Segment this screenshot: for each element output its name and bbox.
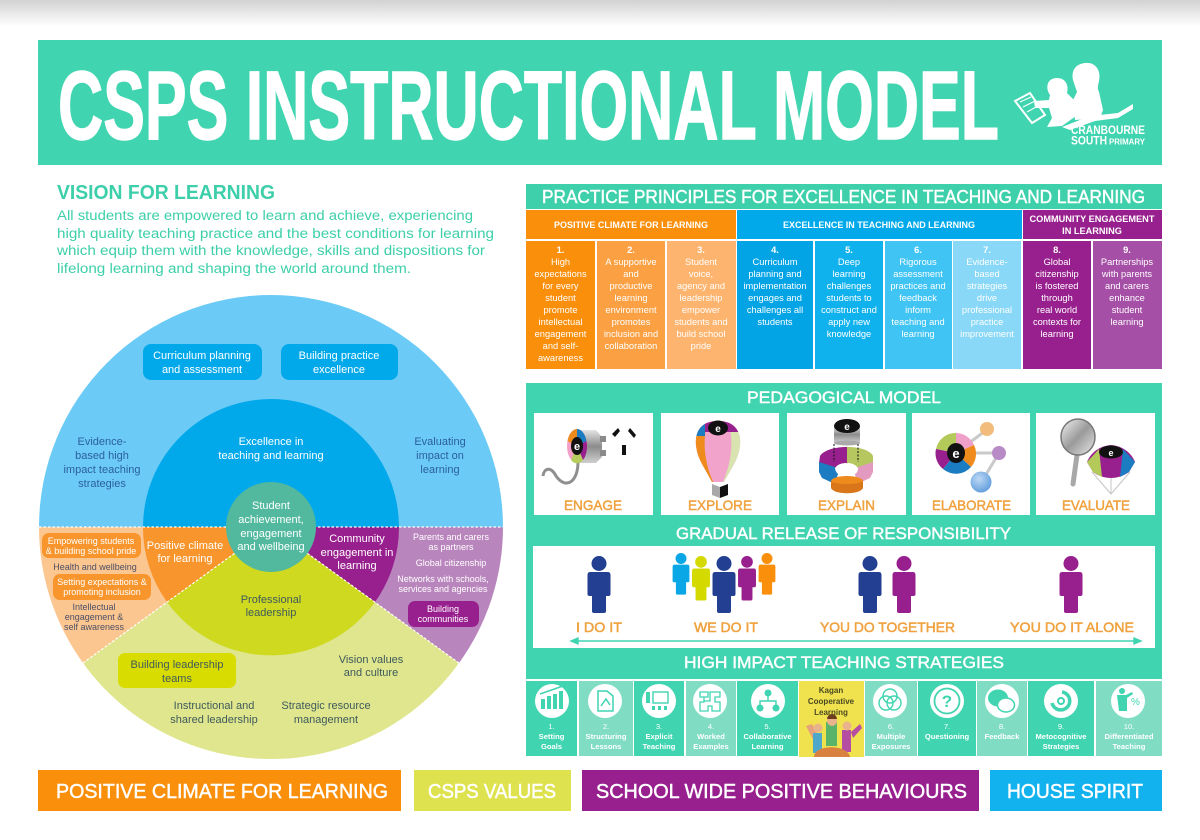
- principle 2: collaboration: [605, 341, 657, 351]
- strategy 5: Collaborative: [743, 732, 792, 741]
- footer bar: positive behaviours: SCHOOL WIDE POSITIVE BEHAVIOURS: [596, 781, 967, 803]
- principle 5: 5.: [845, 245, 853, 255]
- principle 5: Deep: [838, 257, 860, 267]
- pill: building practice: Building practice: [299, 350, 379, 362]
- icon: cylinder and ring: e: [844, 422, 850, 433]
- sector: positive climate inner: [143, 527, 271, 602]
- principle 3: agency and: [677, 281, 725, 291]
- principle 8: citizenship: [1035, 269, 1079, 279]
- principle 9: and carers: [1105, 281, 1149, 291]
- title banner: [38, 40, 1162, 165]
- strategy 2: 2.: [603, 722, 609, 731]
- principle 7: 7.: [983, 245, 991, 255]
- label: evidence-based: based high: [75, 450, 129, 462]
- principle 2: environment: [605, 305, 657, 315]
- footer bar: positive climate: [38, 770, 401, 811]
- vision for learning: [56, 182, 494, 276]
- principle 8: learning: [1040, 329, 1074, 339]
- label: vision values: and culture: [344, 667, 398, 679]
- sector: excellence inner: [143, 399, 399, 527]
- principle 5: learning: [832, 269, 866, 279]
- principle 9: learning: [1110, 317, 1144, 327]
- principle 7: improvement: [960, 329, 1014, 339]
- principle 5: [815, 241, 883, 369]
- vision text: All students are empowered to learn and achieve, experiencing: [57, 208, 473, 223]
- principle 6: assessment: [893, 269, 943, 279]
- gradual release heading: GRADUAL RELEASE OF RESPONSIBILITY: [676, 524, 1011, 543]
- principle 7: [953, 241, 1021, 369]
- principle 1: for every: [542, 281, 579, 291]
- strategy 6: 6.: [888, 722, 894, 731]
- centre circle: engagement: [240, 528, 302, 540]
- strategy 1: 1.: [548, 722, 555, 731]
- footer bar: CSPS values: CSPS VALUES: [428, 781, 556, 803]
- Kagan cooperative learning card: Kagan: [819, 686, 843, 695]
- strategy 6: Multiple: [877, 732, 905, 741]
- principle 3: leadership: [680, 293, 722, 303]
- strategy 5: 5.: [764, 722, 771, 731]
- principle 8: is fostered: [1036, 281, 1078, 291]
- strategy 5: Learning: [751, 742, 784, 751]
- strategy 7: Questioning: [925, 732, 970, 741]
- principle 2: A supportive: [605, 257, 657, 267]
- principle 5: challenges: [827, 281, 872, 291]
- label: community engagement: learning: [337, 560, 377, 572]
- label: professional leadership: leadership: [246, 607, 296, 619]
- label: elaborate: ELABORATE: [932, 497, 1011, 513]
- logo: Cranbourne South Primary: SOUTH: [1071, 136, 1107, 148]
- footer bar: positive behaviours: [582, 770, 979, 811]
- strategy 1: Goals: [541, 742, 562, 751]
- vision text: lifelong learning and shaping the world around them.: [57, 261, 411, 276]
- pill: curriculum planning: and assessment: [162, 364, 242, 376]
- label: community engagement: engagement in: [321, 547, 393, 559]
- principle 4: implementation: [743, 281, 807, 291]
- strategy 3: Explicit: [645, 732, 673, 741]
- label: evaluate: EVALUATE: [1062, 497, 1130, 513]
- label: evaluating impact: impact on: [416, 450, 464, 462]
- principle 3: voice,: [689, 269, 713, 279]
- card: explore: [661, 413, 779, 515]
- principle 6: inform: [905, 305, 931, 315]
- pill: building leadership teams: Building leadership: [131, 659, 223, 671]
- strategy 10: 10.: [1124, 722, 1134, 731]
- principle 1: expectations: [534, 269, 587, 279]
- principle 1: student: [545, 293, 576, 303]
- centre circle: [226, 482, 316, 572]
- strategy 5: [737, 681, 798, 756]
- Kagan cooperative learning card: Cooperative: [808, 697, 855, 706]
- principle 6: learning: [901, 329, 935, 339]
- principle 8: Global: [1044, 257, 1070, 267]
- principle 7: based: [974, 269, 1000, 279]
- label: evaluating impact: learning: [420, 464, 460, 476]
- footer bar: positive climate: POSITIVE CLIMATE FOR LEARNING: [56, 781, 388, 803]
- label: positive climate: for learning: [157, 553, 213, 565]
- principle 5: students to: [826, 293, 872, 303]
- Kagan cooperative learning card: [799, 681, 864, 757]
- sector: excellence outer: [39, 295, 503, 527]
- principle 3: [667, 241, 736, 369]
- principle 9: with parents: [1101, 269, 1152, 279]
- principle 4: planning and: [748, 269, 802, 279]
- principle 4: [737, 241, 813, 369]
- principle 6: Rigorous: [899, 257, 937, 267]
- principle 1: High: [551, 257, 570, 267]
- principle 9: Partnerships: [1101, 257, 1153, 267]
- label: networks: services and agencies: [398, 584, 488, 594]
- strategy 6: Exposures: [872, 742, 910, 751]
- pill: empowering students: Empowering students: [48, 536, 135, 546]
- label: networks: Networks with schools,: [397, 574, 489, 584]
- principle 6: feedback: [899, 293, 937, 303]
- label: professional leadership: Professional: [241, 594, 301, 606]
- card: explain: [787, 413, 906, 515]
- people: we do it: [673, 553, 775, 613]
- principle 8: through: [1041, 293, 1073, 303]
- arrow: release continuum: [571, 638, 1141, 644]
- pill: empowering students: [42, 533, 141, 558]
- panel: practice principles: [526, 184, 1162, 369]
- category: positive climate: [526, 210, 736, 239]
- person: you do it alone: [1060, 556, 1082, 613]
- principle 3: 3.: [697, 245, 705, 255]
- principle 7: practice: [971, 317, 1003, 327]
- principle 3: students and: [674, 317, 728, 327]
- principle 8: real world: [1037, 305, 1077, 315]
- sector: community outer: [271, 527, 503, 663]
- principle 1: engagement: [535, 329, 587, 339]
- label: health and wellbeing: Health and wellbeing: [53, 562, 137, 572]
- card: elaborate: [912, 413, 1030, 515]
- high impact heading: HIGH IMPACT TEACHING STRATEGIES: [684, 653, 1004, 672]
- principle 7: strategies: [967, 281, 1008, 291]
- pill: empowering students: & building school pride: [46, 546, 136, 556]
- category: positive climate: POSITIVE CLIMATE FOR LEARNING: [554, 220, 708, 230]
- pill: building practice: excellence: [313, 364, 365, 376]
- label: positive climate: Positive climate: [147, 540, 223, 552]
- principle 7: Evidence-: [966, 257, 1008, 267]
- strategy 1: Setting: [539, 732, 565, 741]
- strategy 9: [1028, 681, 1094, 756]
- principle 2: promotes: [612, 317, 651, 327]
- pill: building practice: [281, 344, 398, 380]
- strategy 8: [977, 681, 1027, 756]
- sector: community inner: [271, 527, 399, 602]
- category: excellence: EXCELLENCE IN TEACHING AND LEARNING: [783, 220, 975, 230]
- principle 6: 6.: [914, 245, 922, 255]
- label: evidence-based: impact teaching: [63, 464, 141, 476]
- logo: Cranbourne South Primary: CRANBOURNE: [1071, 125, 1145, 137]
- label: explain: EXPLAIN: [818, 497, 875, 513]
- category: community engagement: [1023, 210, 1162, 239]
- strategy 3: Teaching: [643, 742, 676, 751]
- icon: magnifier and parachute: e: [1108, 448, 1114, 458]
- principle 5: knowledge: [827, 329, 871, 339]
- strategy 9: Strategies: [1043, 742, 1079, 751]
- principle 6: practices and: [890, 281, 946, 291]
- vision text: which equip them with the knowledge, skills and dispositions for: [56, 243, 486, 258]
- label: strategic resource: management: [294, 714, 358, 726]
- practice principles heading: PRACTICE PRINCIPLES FOR EXCELLENCE IN TEACHING AND LEARNING: [542, 186, 1145, 207]
- vision heading: VISION FOR LEARNING: [57, 182, 275, 204]
- centre circle: and wellbeing: [237, 541, 305, 553]
- strategy 6: [865, 681, 917, 756]
- principle 2: inclusion and: [604, 329, 658, 339]
- label: engage: ENGAGE: [564, 497, 622, 513]
- principle 4: students: [757, 317, 793, 327]
- label: strategic resource: Strategic resource: [281, 700, 371, 712]
- strategy 4: [686, 681, 736, 756]
- pill: building leadership teams: [118, 653, 236, 688]
- Kagan cooperative learning card: Learning: [814, 708, 848, 717]
- strategy 1: [526, 681, 577, 756]
- category: community engagement: COMMUNITY ENGAGEMENT: [1030, 214, 1155, 224]
- principle 4: engages and: [748, 293, 802, 303]
- centre circle: achievement,: [238, 514, 304, 526]
- label: vision values: Vision values: [339, 654, 404, 666]
- pill: building communities: [408, 601, 479, 627]
- strategy 10: Differentiated: [1105, 732, 1154, 741]
- pill: curriculum planning: [143, 344, 262, 380]
- principle 1: [526, 241, 595, 369]
- footer bar: CSPS values: [414, 770, 571, 811]
- principle 7: drive: [977, 293, 997, 303]
- principle 1: promote: [543, 305, 578, 315]
- principle 9: student: [1112, 305, 1143, 315]
- category: community engagement: IN LEARNING: [1062, 226, 1122, 236]
- icon: plug: e: [574, 441, 580, 453]
- card: evaluate: [1036, 413, 1155, 515]
- strategy 10: [1096, 681, 1162, 756]
- principle 8: 8.: [1053, 245, 1061, 255]
- logo: Cranbourne South Primary: [1015, 63, 1146, 148]
- sector: leadership outer: [83, 527, 459, 759]
- strategy 9: 9.: [1058, 722, 1064, 731]
- pill: building leadership teams: teams: [162, 673, 192, 685]
- label: intellectual engagement: engagement &: [65, 612, 123, 622]
- sector: leadership inner: [167, 527, 375, 655]
- footer bar: house spirit: HOUSE SPIRIT: [1007, 781, 1143, 803]
- principle 9: [1093, 241, 1162, 369]
- label: community engagement: Community: [329, 533, 385, 545]
- principle 8: [1023, 241, 1091, 369]
- principle 3: empower: [682, 305, 720, 315]
- principle 3: pride: [691, 341, 711, 351]
- label: intellectual engagement: self awareness: [64, 622, 125, 632]
- strategy 7: [918, 681, 976, 756]
- pill: setting expectations: [53, 574, 151, 600]
- principle 8: contexts for: [1033, 317, 1081, 327]
- label: global citizenship: Global citizenship: [416, 558, 486, 568]
- icon: molecule: e: [952, 446, 960, 461]
- label: evidence-based: Evidence-: [78, 436, 127, 448]
- principle 6: [885, 241, 952, 369]
- principle 4: 4.: [771, 245, 779, 255]
- principle 2: learning: [614, 293, 648, 303]
- pill: setting expectations: promoting inclusion: [63, 587, 141, 597]
- icon: balloon: e: [715, 424, 721, 435]
- principle 7: professional: [962, 305, 1012, 315]
- ring segments: [819, 447, 847, 468]
- circular leadership diagram: [39, 295, 503, 759]
- centre circle: Student: [252, 500, 290, 512]
- principle 3: Student: [685, 257, 717, 267]
- category: excellence: [737, 210, 1022, 239]
- principle 3: build school: [676, 329, 726, 339]
- pedagogical model heading: PEDAGOGICAL MODEL: [747, 388, 941, 407]
- pill: building communities: Building: [427, 604, 459, 614]
- strategy 3: [634, 681, 684, 756]
- principle 9: 9.: [1123, 245, 1131, 255]
- principle 9: enhance: [1109, 293, 1145, 303]
- vision text: high quality teaching practice and the best conditions for learning: [57, 226, 494, 241]
- label: evaluating impact: Evaluating: [414, 436, 466, 448]
- principle 5: construct and: [821, 305, 877, 315]
- strategy 7: ?: [942, 692, 952, 711]
- pill: building communities: communities: [418, 614, 469, 624]
- pill: setting expectations: Setting expectations &: [57, 577, 147, 587]
- strategy 2: [579, 681, 633, 756]
- label: explore: EXPLORE: [688, 497, 752, 513]
- strategy 3: 3.: [656, 722, 662, 731]
- strategy 8: 8.: [999, 722, 1005, 731]
- principle 6: teaching and: [891, 317, 945, 327]
- principle 2: 2.: [627, 245, 635, 255]
- principle 4: Curriculum: [753, 257, 798, 267]
- people: you do together: [858, 556, 916, 613]
- panel: gradual release: [533, 546, 1155, 648]
- principle 2: and: [623, 269, 639, 279]
- strategy 9: Metocognitive: [1035, 732, 1087, 741]
- label: intellectual engagement: Intellectual: [72, 602, 116, 612]
- card: engage: [534, 413, 653, 515]
- strategy 4: 4.: [708, 722, 714, 731]
- panel: pedagogical, release and strategies: [526, 383, 1162, 761]
- strategy 10: Teaching: [1113, 742, 1146, 751]
- label: you do together: YOU DO TOGETHER: [820, 619, 955, 635]
- person: I do it: [588, 556, 610, 613]
- principle 2: productive: [610, 281, 652, 291]
- label: parents and carers: as partners: [428, 542, 474, 552]
- principle 1: 1.: [557, 245, 564, 255]
- label: instructional leadership: Instructional and: [174, 700, 254, 712]
- principle 5: apply new: [828, 317, 870, 327]
- strategy 2: Lessons: [591, 742, 621, 751]
- sector: positive climate outer: [39, 527, 271, 663]
- label: you do it alone: YOU DO IT ALONE: [1010, 619, 1134, 635]
- vision text: [56, 208, 494, 276]
- strategy 7: 7.: [944, 722, 950, 731]
- strategy 4: Examples: [693, 742, 729, 751]
- label: I do it: I DO IT: [576, 619, 622, 635]
- strategy 10: %: [1131, 697, 1140, 708]
- strategy 4: Worked: [697, 732, 725, 741]
- strategy 8: Feedback: [984, 732, 1020, 741]
- label: instructional leadership: shared leadership: [170, 714, 258, 726]
- principle 2: [597, 241, 665, 369]
- label: parents and carers: Parents and carers: [413, 532, 490, 542]
- icon: cartoon students: [806, 714, 862, 757]
- label: excellence in teaching: teaching and learning: [218, 450, 324, 462]
- pill: curriculum planning: Curriculum planning: [153, 350, 251, 362]
- label: we do it: WE DO IT: [694, 619, 758, 635]
- principle 1: awareness: [538, 353, 583, 363]
- principle 1: and self-: [543, 341, 578, 351]
- principle 1: intellectual: [539, 317, 582, 327]
- logo: Cranbourne South Primary: PRIMARY: [1109, 138, 1146, 146]
- label: excellence in teaching: Excellence in: [239, 436, 303, 448]
- label: evidence-based: strategies: [78, 478, 126, 490]
- strategy 2: Structuring: [586, 732, 627, 741]
- footer bar: house spirit: [990, 770, 1162, 811]
- principle 4: challenges all: [747, 305, 803, 315]
